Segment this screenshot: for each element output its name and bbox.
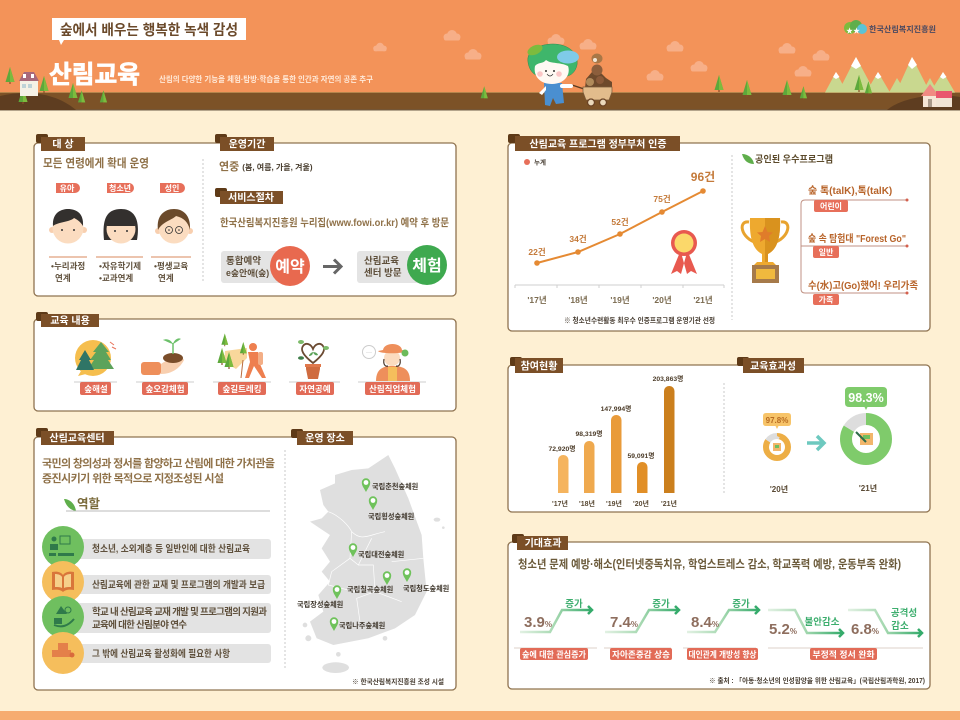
bar chart: 59,091명 [627, 451, 655, 460]
line chart: 52건 [611, 217, 629, 227]
item: forest senses: 숲오감체험 [145, 384, 185, 394]
step: experience [357, 245, 447, 285]
effect: interest: 3.9% [524, 614, 552, 631]
donut 2021: '21년 [859, 483, 877, 493]
donut 2020: '20년 [770, 484, 788, 494]
tab: period [215, 134, 274, 151]
role row 1 [42, 526, 271, 568]
line chart: '20년 [652, 295, 672, 305]
map labels: 국립나주숲체원 [339, 621, 386, 630]
legend: 누계 [534, 158, 546, 166]
tab: expected effects [512, 534, 568, 550]
panel: government certification [508, 134, 930, 331]
subtitle: 산림의 다양한 기능을 체험·탐방·학습을 통한 인간과 자연의 공존 추구 [159, 74, 374, 84]
role heading [64, 497, 270, 511]
map footnote: ※ 한국산림복지진흥원 조성 시설 [352, 677, 444, 686]
age group: teen: 청소년 [109, 183, 131, 193]
speech label: 숲에서 배우는 행복한 녹색 감성 [60, 22, 238, 39]
age group: child [49, 183, 87, 283]
effect: aggression decrease: 공격성 [891, 608, 917, 619]
step: experience: 체험 [412, 257, 442, 275]
bracket lines [801, 200, 907, 293]
map labels: 국립장성숲체원 [297, 600, 344, 609]
item: forest trekking: 숲길트레킹 [222, 384, 262, 394]
center description: 국민의 창의성과 정서를 함양하고 산림에 대한 가치관을 [42, 456, 275, 470]
tab: locations: 운영 장소 [305, 432, 345, 444]
right hill [887, 95, 960, 110]
program: forest go: 일반 [819, 247, 834, 257]
donut 2021: 98.3% [848, 391, 884, 405]
tab: participation: 참여현황 [521, 360, 557, 372]
mountains [825, 57, 955, 92]
line chart: '19년 [610, 295, 630, 305]
effect: anxiety decrease [768, 610, 843, 638]
effect: interest: 숲에 대한 관심증가 [522, 650, 586, 660]
role row 3: 학교 내 산림교육 교재 개발 및 프로그램의 지원과 [92, 606, 267, 618]
item: nature crafts [289, 340, 340, 395]
item: forest jobs: 산림직업체험 [369, 384, 416, 394]
age group: adult: 연계 [158, 273, 174, 283]
logo: ★★ [846, 27, 860, 35]
age group: adult [151, 183, 193, 283]
bar chart [548, 374, 683, 508]
tab: locations [291, 429, 353, 445]
speech label [52, 18, 246, 45]
program: talk: 숲 톡(talK),톡(talK) [808, 185, 892, 197]
line chart: 75건 [653, 194, 671, 204]
map labels: 국립칠곡숲체원 [347, 585, 394, 594]
trees [6, 67, 872, 104]
panel: participation and effectiveness [508, 357, 930, 512]
role row 4 [42, 632, 271, 674]
role row 1: 청소년, 소외계층 등 일반인에 대한 산림교육 [92, 543, 250, 555]
program: family: 가족 [819, 294, 834, 304]
tab: center: 산림교육센터 [49, 432, 105, 444]
chart footnote: ※ 청소년수련활동 최우수 인증프로그램 운영기관 선정 [564, 315, 715, 325]
map labels [297, 482, 450, 630]
step: reservation: e숲안애(숲) [226, 268, 269, 278]
bottom band [0, 711, 960, 720]
effect label: negative emotion relief [768, 648, 923, 660]
tab: procedure: 서비스절차 [228, 191, 274, 204]
bar chart: '17년 [552, 499, 568, 508]
left hill [0, 93, 76, 110]
bar chart: 147,994명 [601, 404, 631, 413]
arrow: next step [323, 260, 341, 274]
bar chart: '20년 [633, 499, 649, 508]
tab: target [36, 134, 85, 151]
right house [921, 84, 952, 107]
bar chart: 203,863명 [653, 374, 683, 383]
icon: ribbon medal [671, 230, 697, 274]
effect: anxiety decrease: 불안감소 [805, 616, 840, 628]
age group: child: 연계 [55, 273, 71, 283]
effect: self esteem: 자아존중감 상승 [612, 650, 670, 660]
age group: adult: 성인 [165, 183, 179, 193]
bar chart: 98,319명 [575, 429, 603, 438]
arrow: increase [807, 436, 824, 450]
operating period text: 연중 (봄, 여름, 가을, 겨울) [219, 160, 313, 173]
effect: self esteem: 7.4% [610, 614, 638, 631]
tab: effectiveness: 교육효과성 [750, 360, 796, 372]
effect: self esteem [604, 598, 679, 660]
tab: period: 운영기간 [229, 138, 265, 150]
tab: certification [508, 134, 680, 151]
age group: child: 유아 [60, 183, 75, 193]
bar chart: '19년 [606, 499, 622, 508]
logo [844, 20, 936, 35]
map labels: 국립청도숲체원 [403, 584, 450, 593]
map labels: 국립횡성숲체원 [368, 512, 415, 521]
donut 2021 [845, 387, 887, 493]
center description: 증진시키기 위한 목적으로 지정조성된 시설 [42, 471, 224, 485]
mascot with cart [526, 43, 612, 106]
effect: aggression decrease: 6.8% [851, 621, 879, 638]
step: reservation: 통합예약 [226, 255, 261, 267]
tab: education content [36, 312, 99, 327]
donut 2020: 97.8% [766, 416, 788, 425]
panel: education content [34, 312, 456, 411]
target heading: 모든 연령에게 확대 운영 [43, 156, 149, 170]
item: forest interpretation: 숲해설 [84, 384, 108, 394]
step: reservation [221, 246, 310, 286]
procedure description: 한국산림복지진흥원 누리집(www.fowi.or.kr) 예약 후 방문 [220, 216, 449, 229]
map labels: 국립대전숲체원 [358, 550, 405, 559]
map of Korea [297, 455, 450, 673]
effect: aggression decrease [848, 608, 922, 638]
panel: expected effects [508, 534, 930, 689]
role row 3: 교육에 대한 산림분야 연수 [92, 619, 187, 631]
map labels: 국립춘천숲체원 [372, 482, 419, 491]
effect: self esteem: 증가 [652, 598, 670, 610]
excellent programs heading: 공인된 우수프로그램 [755, 154, 833, 166]
program: family: 수(水)고(Go)했어! 우리가족 [808, 279, 918, 292]
map pins [330, 478, 411, 631]
icon: trophy [742, 218, 788, 283]
bar chart: '21년 [661, 499, 677, 508]
line chart: '17년 [527, 295, 547, 305]
line chart: 22건 [528, 247, 546, 257]
role row 2: 산림교육에 관한 교재 및 프로그램의 개발과 보급 [92, 579, 265, 591]
tab: procedure [215, 188, 283, 204]
tab: center [36, 428, 114, 445]
effect: anxiety decrease: 5.2% [769, 621, 797, 638]
program: forest go [808, 232, 908, 258]
program: talk [808, 185, 908, 212]
tab: target: 대 상 [52, 138, 74, 150]
effects headline: 청소년 문제 예방·해소(인터넷중독치유, 학업스트레스 감소, 학교폭력 예방, 운동부족 완화) [518, 557, 901, 571]
line chart: 34건 [569, 234, 587, 244]
panel: forest education center [34, 428, 456, 690]
role row 4: 그 밖에 산림교육 활성화에 필요한 사항 [92, 648, 230, 660]
source footnote: ※ 출처 : 「아동·청소년의 인성함양을 위한 산림교육」(국립산림과학원, 2017) [709, 676, 925, 685]
legend [524, 158, 546, 166]
line chart [515, 170, 724, 305]
step: experience: 센터 방문 [364, 267, 402, 279]
age group: teen: •교과연계 [99, 273, 133, 283]
age group: child: •누리과정 [51, 261, 85, 271]
step: experience: 산림교육 [364, 255, 399, 267]
logo: 한국산림복지진흥원 [869, 24, 936, 34]
bar chart: 72,920명 [548, 444, 576, 453]
effect: relationships: 8.4% [691, 614, 719, 631]
age group: adult: •평생교육 [154, 261, 188, 271]
program: forest go: 숲 속 탐험대 "Forest Go" [808, 232, 906, 245]
age group: teen [96, 183, 143, 283]
program: family [808, 279, 918, 305]
effect: aggression decrease: 감소 [891, 620, 909, 632]
line chart: '18년 [568, 295, 588, 305]
effect: relationships: 대인관계 개방성 향상 [688, 650, 757, 660]
left house [19, 72, 39, 96]
effect: relationships [683, 598, 759, 660]
item: nature crafts: 자연공예 [299, 384, 331, 394]
effect: interest [514, 598, 597, 660]
effect: interest: 증가 [565, 598, 583, 610]
program: talk: 어린이 [820, 201, 842, 211]
role row 2 [42, 561, 271, 603]
tab: effectiveness [737, 357, 804, 373]
tab: expected effects: 기대효과 [525, 536, 561, 550]
line chart: 96건 [691, 170, 715, 184]
bar chart: '18년 [579, 499, 595, 508]
main title: 산림교육 [49, 61, 140, 89]
item: forest jobs [358, 344, 426, 395]
clouds [373, 30, 830, 80]
step: reservation: 예약 [275, 258, 305, 276]
effect label: negative emotion relief: 부정적 정서 완화 [812, 650, 875, 660]
item: forest senses [136, 338, 194, 395]
item: forest interpretation [74, 340, 117, 395]
role heading: 역할 [77, 497, 101, 511]
age group: teen: •자유학기제 [99, 261, 141, 271]
item: forest jobs: ··· [366, 350, 372, 356]
effect: relationships: 증가 [732, 598, 750, 610]
item: forest trekking [213, 334, 271, 395]
tab: education content: 교육 내용 [50, 314, 90, 327]
donut 2020 [763, 413, 791, 494]
header banner [0, 0, 960, 110]
tab: participation [510, 357, 563, 373]
tab: certification: 산림교육 프로그램 정부부처 인증 [529, 138, 667, 150]
role row 3 [42, 596, 271, 638]
line chart: '21년 [693, 295, 713, 305]
panel: target and service procedure [34, 134, 456, 296]
